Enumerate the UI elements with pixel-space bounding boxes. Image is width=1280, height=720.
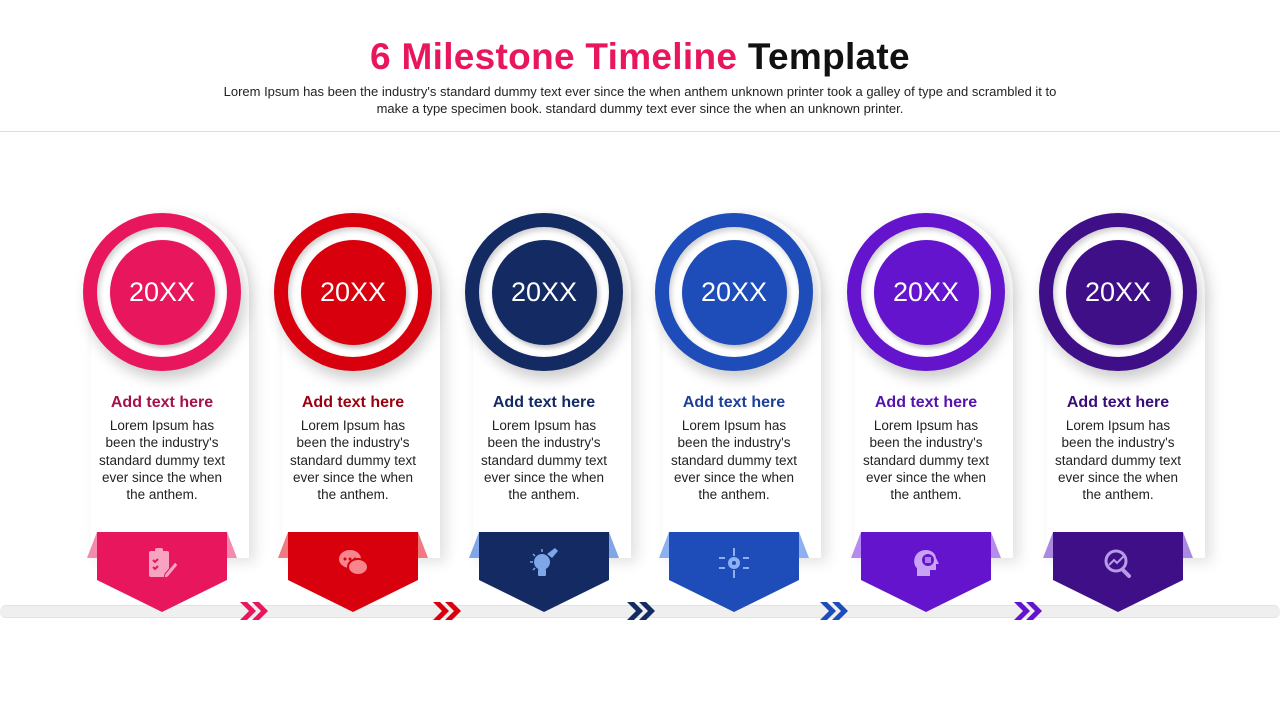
- year circle 1: 20XX: [129, 276, 195, 306]
- icon badge 1: [97, 532, 227, 612]
- icon badge 4: [669, 532, 799, 612]
- text 1: Lorem Ipsum has been the industry's standard dummy text ever since the when the anthem.: [99, 418, 225, 502]
- year circle 6: [1039, 213, 1197, 371]
- heading 6: Add text here: [1067, 394, 1169, 411]
- milestone 5: [845, 212, 1023, 612]
- text 3: Lorem Ipsum has been the industry's standard dummy text ever since the when the anthem.: [481, 418, 607, 502]
- icon badge 5: [861, 532, 991, 612]
- year circle 3: 20XX: [511, 276, 577, 306]
- year circle 3: [465, 213, 623, 371]
- year circle 5: 20XX: [893, 276, 959, 306]
- milestone 2: [272, 212, 450, 612]
- icon badge 6: [1053, 532, 1183, 612]
- icon: chat: [339, 550, 367, 574]
- year circle 5: [847, 213, 1005, 371]
- icon: bulb: [530, 548, 558, 576]
- text 2: Lorem Ipsum has been the industry's standard dummy text ever since the when the anthem.: [290, 418, 416, 502]
- heading 5: Add text here: [875, 394, 977, 411]
- arrow 3: [627, 602, 655, 620]
- icon badge 3: [479, 532, 609, 612]
- arrow 4: [820, 602, 848, 620]
- icon: head gear: [914, 550, 939, 576]
- year circle 4: 20XX: [701, 276, 767, 306]
- icon badge 2: [288, 532, 418, 612]
- subtitle: Lorem Ipsum has been the industry's standard dummy text ever since the when anthem unknown printer took a galley of type and scrambled it to make a type specimen book. standard dummy text ever since the when an unknown printer.: [224, 84, 1056, 116]
- arrow 5: [1014, 602, 1042, 620]
- icon: gear: [719, 548, 749, 578]
- text 4: Lorem Ipsum has been the industry's standard dummy text ever since the when the anthem.: [671, 418, 797, 502]
- icon: clipboard: [149, 548, 178, 578]
- milestone 4: [653, 212, 831, 612]
- year circle 6: 20XX: [1085, 276, 1151, 306]
- milestone 1: [81, 212, 259, 612]
- milestone 3: [463, 212, 641, 612]
- heading 4: Add text here: [683, 394, 785, 411]
- year circle 1: [83, 213, 241, 371]
- text 6: Lorem Ipsum has been the industry's standard dummy text ever since the when the anthem.: [1055, 418, 1181, 502]
- year circle 2: [274, 213, 432, 371]
- year circle 2: 20XX: [320, 276, 386, 306]
- heading 3: Add text here: [493, 394, 595, 411]
- text 5: Lorem Ipsum has been the industry's standard dummy text ever since the when the anthem.: [863, 418, 989, 502]
- icon: magnifier chart: [1104, 550, 1132, 578]
- year circle 4: [655, 213, 813, 371]
- arrow 2: [433, 602, 461, 620]
- title: 6 Milestone Timeline Template: [370, 36, 910, 77]
- heading 2: Add text here: [302, 394, 404, 411]
- timeline bar: [0, 605, 1280, 618]
- arrow 1: [240, 602, 268, 620]
- milestone 6: [1037, 212, 1215, 612]
- heading 1: Add text here: [111, 394, 213, 411]
